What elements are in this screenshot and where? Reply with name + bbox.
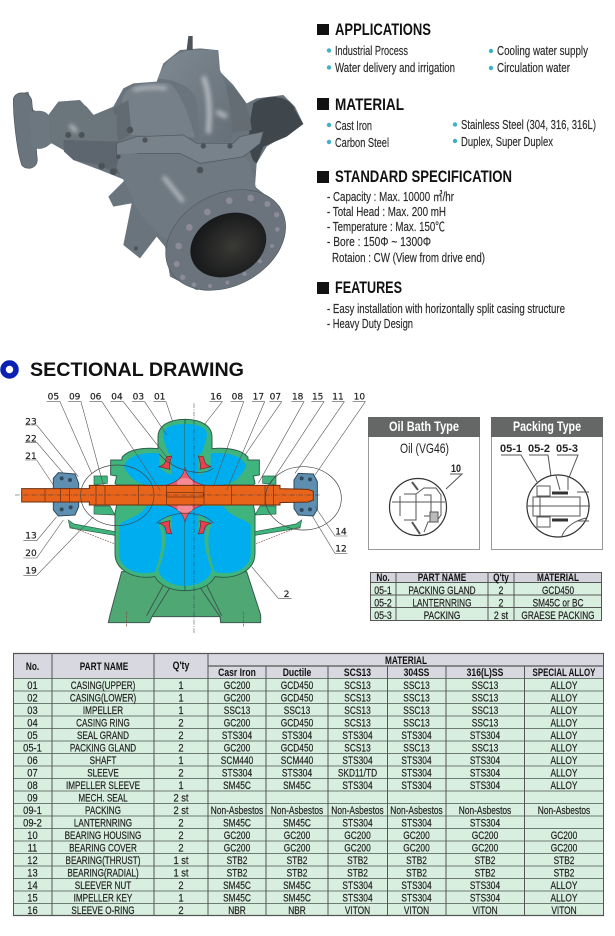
applications list: Cooling water supply bbox=[497, 44, 589, 58]
table column: ductile: Non-Asbestos bbox=[271, 805, 323, 817]
table column: scs13: SKD11/TD bbox=[338, 767, 377, 780]
part number leaders bbox=[23, 402, 365, 598]
table column: 316(L)ss: SSC13 bbox=[472, 680, 498, 692]
table column: special alloy: STB2 bbox=[554, 855, 574, 867]
table: packing parts: 05-2 bbox=[374, 598, 392, 610]
table header: No. bbox=[26, 661, 39, 673]
table column: part name: BEARING(RADIAL) bbox=[67, 867, 139, 880]
heading: material: MATERIAL bbox=[335, 95, 404, 114]
product photo: split case pump bbox=[13, 36, 303, 310]
table column: number: 16 bbox=[27, 905, 38, 917]
part number labels: 16 bbox=[210, 392, 222, 402]
table: packing parts bbox=[370, 572, 602, 622]
table column: 304ss bbox=[390, 680, 443, 917]
table column: ductile: GC200 bbox=[284, 842, 311, 855]
shaft bbox=[15, 403, 320, 633]
table column: quantity: 1 bbox=[178, 893, 184, 905]
table column: ductile: SSC13 bbox=[284, 705, 310, 717]
table column: 316(L)ss: STS304 bbox=[470, 880, 501, 892]
table column: ductile: GCD450 bbox=[281, 692, 314, 705]
table column: part name: CASING RING bbox=[76, 717, 130, 730]
table column: number: 15 bbox=[27, 893, 38, 905]
table column: ductile: SCM440 bbox=[281, 755, 314, 767]
table column: 316(L)ss: STS304 bbox=[470, 817, 501, 830]
material list: Cast Iron bbox=[335, 119, 372, 133]
sectional drawing diagram bbox=[15, 392, 365, 633]
table column: special alloy: STB2 bbox=[554, 867, 574, 880]
table column: 304ss: SSC13 bbox=[403, 705, 430, 717]
table column: part name: PACKING GLAND bbox=[70, 742, 136, 755]
table column: scs13: Non-Asbestos bbox=[331, 805, 384, 817]
table column: number: 09 bbox=[27, 793, 38, 805]
table column: part name: SLEEVER NUT bbox=[75, 880, 131, 892]
table column: 316(L)ss: STS304 bbox=[470, 780, 501, 792]
table column: ductile: SM45C bbox=[283, 780, 311, 792]
panel: packing type: 05-1 bbox=[500, 443, 522, 455]
table column: 304ss: STS304 bbox=[401, 880, 432, 892]
table column: 316(L)ss: Non-Asbestos bbox=[459, 805, 511, 817]
table column: special alloy: ALLOY bbox=[551, 780, 578, 792]
part number labels bbox=[25, 392, 365, 600]
table column: quantity: 2 st bbox=[173, 805, 189, 817]
table column: cast iron: Non-Asbestos bbox=[211, 805, 263, 817]
table column: ductile: STS304 bbox=[282, 767, 313, 780]
panel: oil bath type: Oil Bath Type bbox=[389, 418, 459, 434]
table column: quantity: 2 bbox=[178, 730, 184, 742]
table header: 304SS bbox=[404, 667, 430, 679]
table column: number: 11 bbox=[28, 843, 38, 855]
table column: cast iron: STS304 bbox=[222, 730, 253, 742]
part number labels: 22 bbox=[25, 435, 37, 445]
table column: 316(L)ss: SSC13 bbox=[472, 742, 498, 755]
table column: special alloy: ALLOY bbox=[551, 705, 578, 717]
table column: 304ss: STS304 bbox=[401, 780, 432, 792]
table header: PART NAME bbox=[80, 661, 129, 673]
table column: special alloy bbox=[538, 680, 590, 917]
part number labels: 17 bbox=[253, 392, 264, 402]
table column: scs13: GC200 bbox=[344, 842, 371, 855]
heading: material bbox=[317, 95, 404, 114]
table column: 316(L)ss: STS304 bbox=[470, 892, 501, 905]
table header: Q'ty bbox=[173, 660, 190, 672]
specification list: - Bore : 150Φ ~ 1300Φ bbox=[327, 235, 431, 249]
table column: ductile: SM45C bbox=[283, 817, 311, 830]
table column: 304ss: STB2 bbox=[406, 855, 427, 867]
table column: cast iron: STS304 bbox=[222, 767, 253, 780]
table column: number: 10 bbox=[27, 830, 38, 842]
material list: Carbon Steel bbox=[335, 136, 389, 150]
applications list bbox=[327, 44, 589, 75]
casing and water passages bbox=[68, 419, 302, 591]
table column: part name: LANTERNRING bbox=[74, 817, 132, 830]
table: packing parts: 2 bbox=[499, 598, 504, 610]
table column: scs13: SCS13 bbox=[344, 680, 371, 692]
table column: 304ss: SSC13 bbox=[403, 680, 430, 692]
table column: cast iron: STB2 bbox=[227, 867, 247, 880]
table column: 316(L)ss: STB2 bbox=[475, 867, 495, 880]
table column: ductile bbox=[271, 680, 323, 917]
table column: 304ss: GC200 bbox=[403, 830, 430, 842]
table column: 316(L)ss bbox=[459, 680, 511, 917]
table column: special alloy: ALLOY bbox=[551, 892, 578, 905]
specification list: - Temperature : Max. 150℃ bbox=[327, 220, 445, 234]
table: packing parts: PACKING GLAND bbox=[408, 585, 476, 597]
table column: 316(L)ss: GC200 bbox=[472, 842, 499, 855]
table column: scs13: SCS13 bbox=[344, 717, 371, 730]
table column: number: 04 bbox=[27, 718, 38, 730]
table column: 304ss: STB2 bbox=[406, 867, 427, 880]
table column: 304ss: SSC13 bbox=[403, 742, 430, 755]
part number labels: 03 bbox=[133, 392, 144, 402]
part number labels: 20 bbox=[25, 549, 37, 559]
table column: number: 05-1 bbox=[23, 743, 42, 755]
table column: number: 14 bbox=[27, 880, 38, 892]
table column: ductile: STB2 bbox=[287, 855, 307, 867]
table column: 316(L)ss: SSC13 bbox=[472, 717, 498, 730]
table column: 316(L)ss: STS304 bbox=[470, 755, 501, 767]
applications list: Industrial Process bbox=[335, 44, 408, 58]
table column: scs13: STB2 bbox=[347, 855, 368, 867]
table column: number: 06 bbox=[27, 755, 38, 767]
table column: cast iron: GC200 bbox=[224, 717, 251, 730]
table column: special alloy: ALLOY bbox=[551, 755, 578, 767]
table column: quantity: 2 bbox=[178, 843, 184, 855]
table column: special alloy: GC200 bbox=[551, 830, 578, 842]
table column: cast iron: SSC13 bbox=[224, 705, 250, 717]
table: packing parts: GRAESE PACKING bbox=[521, 610, 595, 622]
table column: part name: MECH. SEAL bbox=[78, 792, 128, 805]
table column: quantity: 1 st bbox=[173, 855, 189, 867]
table column: 304ss: GC200 bbox=[403, 842, 430, 855]
heading: features bbox=[317, 278, 402, 297]
table column: scs13: GC200 bbox=[344, 830, 371, 842]
table: packing parts: MATERIAL bbox=[537, 572, 579, 584]
table column: ductile: SM45C bbox=[283, 880, 311, 892]
table: packing parts: PACKING bbox=[424, 610, 460, 622]
table column: 304ss: VITON bbox=[404, 905, 429, 917]
part number labels: 14 bbox=[335, 527, 347, 537]
table column: 304ss: STS304 bbox=[401, 767, 432, 780]
specification list: - Total Head : Max. 200 mH bbox=[327, 205, 446, 219]
part number labels: 2 bbox=[284, 590, 290, 600]
table column: cast iron: SM45C bbox=[223, 892, 251, 905]
table column: number: 12 bbox=[27, 855, 38, 867]
part number labels: 09 bbox=[69, 392, 81, 402]
part number labels: 01 bbox=[154, 392, 165, 402]
table: parts and materials bbox=[13, 653, 604, 917]
table column: 316(L)ss: STS304 bbox=[470, 767, 501, 780]
table column: special alloy: ALLOY bbox=[551, 880, 578, 892]
table: packing parts: Q'ty bbox=[493, 572, 509, 584]
table column: quantity: 1 st bbox=[173, 868, 189, 880]
panel: oil bath type: Oil (VG46) bbox=[400, 440, 449, 456]
table column: part name: IMPELLER KEY bbox=[74, 892, 133, 905]
table column: part name: CASING(LOWER) bbox=[70, 692, 136, 705]
table: packing parts: 2 st bbox=[494, 610, 508, 622]
panel: packing type: 05-2 bbox=[528, 443, 550, 455]
part number labels: 12 bbox=[335, 545, 347, 555]
table column: part name bbox=[65, 680, 141, 917]
heading: standard specification: STANDARD SPECIFICATION bbox=[335, 167, 512, 186]
table column: number: 05 bbox=[27, 730, 38, 742]
part number labels: 05 bbox=[48, 392, 59, 402]
table column: cast iron: SCM440 bbox=[221, 755, 254, 767]
table column: scs13: STS304 bbox=[342, 780, 373, 792]
table column: cast iron: GC200 bbox=[224, 842, 251, 855]
part number labels: 06 bbox=[90, 392, 102, 402]
table column: scs13: STS304 bbox=[342, 892, 373, 905]
table column: 316(L)ss: SSC13 bbox=[472, 705, 498, 717]
table column: special alloy: ALLOY bbox=[551, 767, 578, 780]
table column: number: 01 bbox=[27, 680, 38, 692]
table: packing parts: 05-1 bbox=[374, 585, 392, 597]
table column: quantity: 2 bbox=[178, 880, 184, 892]
part number labels: 15 bbox=[312, 392, 323, 402]
table column: special alloy: ALLOY bbox=[551, 742, 578, 755]
table column: quantity: 2 bbox=[178, 718, 184, 730]
table: packing parts: No. bbox=[376, 572, 390, 584]
table column: ductile: GC200 bbox=[284, 830, 311, 842]
heading: applications: APPLICATIONS bbox=[335, 20, 431, 39]
table column: ductile: STB2 bbox=[287, 867, 307, 880]
table column: quantity: 2 bbox=[178, 905, 184, 917]
table column: number: 09-1 bbox=[23, 805, 42, 817]
specification list bbox=[327, 190, 485, 265]
bearing housing left bbox=[53, 473, 79, 516]
table column: cast iron: NBR bbox=[228, 905, 246, 917]
material list bbox=[327, 118, 596, 150]
table column: number: 03 bbox=[27, 705, 38, 717]
table column: 316(L)ss: STB2 bbox=[475, 855, 495, 867]
part number labels: 23 bbox=[25, 417, 37, 427]
features list: - Heavy Duty Design bbox=[327, 317, 413, 331]
table column: 304ss: STS304 bbox=[401, 892, 432, 905]
table column: quantity: 2 bbox=[178, 818, 184, 830]
table column: cast iron: SM45C bbox=[223, 817, 251, 830]
part number labels: 11 bbox=[332, 392, 344, 402]
table column: number: 02 bbox=[27, 693, 38, 705]
table column: scs13: STS304 bbox=[342, 730, 373, 742]
table column: part name: BEARING(THRUST) bbox=[66, 855, 140, 867]
table header: SCS13 bbox=[344, 667, 372, 679]
table header bbox=[26, 655, 596, 679]
table column: quantity: 1 bbox=[178, 705, 184, 717]
table column: cast iron: GC200 bbox=[224, 692, 251, 705]
part number labels: 07 bbox=[270, 392, 281, 402]
table column: scs13: STS304 bbox=[342, 817, 373, 830]
table column: part name: CASING(UPPER) bbox=[71, 680, 135, 692]
material list: Duplex, Super Duplex bbox=[461, 135, 554, 149]
table: packing parts: PART NAME bbox=[418, 572, 467, 584]
table column: part name: SLEEVE bbox=[87, 767, 119, 780]
table column: cast iron: SM45C bbox=[223, 880, 251, 892]
table column: 304ss: SSC13 bbox=[403, 692, 430, 705]
table column: part name: BEARING COVER bbox=[69, 842, 137, 855]
table header: SPECIAL ALLOY bbox=[533, 667, 596, 679]
table column: special alloy: ALLOY bbox=[551, 692, 578, 705]
table column: ductile: NBR bbox=[288, 905, 306, 917]
table column: scs13: SCS13 bbox=[344, 692, 371, 705]
table column: quantity: 2 bbox=[178, 830, 184, 842]
bearing housing right bbox=[294, 473, 317, 516]
specification list: Rotaion : CW (View from drive end) bbox=[332, 251, 485, 265]
panel: packing type bbox=[491, 417, 603, 550]
table column: ductile: SM45C bbox=[283, 892, 311, 905]
table: packing parts: LANTERNRING bbox=[412, 597, 472, 610]
table column: number: 08 bbox=[27, 780, 38, 792]
panel: oil bath type bbox=[368, 417, 480, 550]
table column: quantity: 1 bbox=[178, 755, 184, 767]
table column: 316(L)ss: STS304 bbox=[470, 730, 501, 742]
heading: applications bbox=[317, 20, 431, 39]
table column: quantity: 2 bbox=[178, 743, 184, 755]
table column: scs13: STS304 bbox=[342, 755, 373, 767]
table column: 304ss: SSC13 bbox=[403, 717, 430, 730]
table column: special alloy: GC200 bbox=[551, 842, 578, 855]
table: packing parts: 05-3 bbox=[374, 610, 392, 622]
table header: MATERIAL bbox=[385, 655, 427, 667]
table column: ductile: STS304 bbox=[282, 730, 313, 742]
table column: number: 09-2 bbox=[23, 818, 42, 830]
table column: number: 13 bbox=[27, 868, 38, 880]
heading: sectional drawing: SECTIONAL DRAWING bbox=[30, 360, 244, 381]
table column: number: 07 bbox=[27, 768, 38, 780]
table column: cast iron: SM45C bbox=[223, 780, 251, 792]
table column: 316(L)ss: SSC13 bbox=[472, 692, 498, 705]
panel: packing type: 05-3 bbox=[556, 443, 578, 455]
table column: scs13: SCS13 bbox=[344, 705, 371, 717]
table column: special alloy: VITON bbox=[551, 905, 577, 917]
part number labels: 10 bbox=[354, 392, 365, 402]
table column: scs13: VITON bbox=[345, 905, 370, 917]
table column: 304ss: STS304 bbox=[401, 817, 432, 830]
table header: Casr Iron bbox=[218, 667, 256, 679]
applications list: Water delivery and irrigation bbox=[335, 61, 455, 75]
table column: special alloy: ALLOY bbox=[551, 730, 578, 742]
table column: cast iron: GC200 bbox=[224, 742, 251, 755]
table column: scs13: SCS13 bbox=[344, 742, 371, 755]
table header: 316(L)SS bbox=[467, 667, 504, 679]
table column: special alloy: Non-Asbestos bbox=[538, 805, 590, 817]
table column: ductile: GCD450 bbox=[281, 680, 314, 692]
table column: part name: BEARING HOUSING bbox=[65, 830, 141, 842]
table column: quantity: 2 bbox=[178, 768, 184, 780]
table column: 316(L)ss: GC200 bbox=[472, 830, 499, 842]
part number labels: 13 bbox=[25, 532, 37, 542]
panel: oil bath type: 10 bbox=[451, 463, 461, 475]
table column: special alloy: ALLOY bbox=[551, 680, 578, 692]
features list bbox=[327, 302, 565, 331]
table column: part name: PACKING bbox=[85, 805, 121, 817]
table: packing parts: 2 bbox=[499, 585, 504, 597]
table column: quantity: 1 bbox=[178, 680, 184, 692]
table: packing parts: SM45C or BC bbox=[533, 597, 583, 610]
table column: quantity bbox=[173, 680, 189, 917]
table column: 304ss: Non-Asbestos bbox=[390, 805, 443, 817]
table column: quantity: 1 bbox=[178, 693, 184, 705]
table column: ductile: GCD450 bbox=[281, 717, 314, 730]
table column: scs13 bbox=[331, 680, 384, 917]
part number labels: 08 bbox=[232, 392, 243, 402]
table column: ductile: GCD450 bbox=[281, 742, 314, 755]
table column: special alloy: ALLOY bbox=[551, 717, 578, 730]
table: packing parts: GCD450 bbox=[542, 585, 575, 597]
table column: cast iron: STB2 bbox=[227, 855, 247, 867]
panel: packing type: Packing Type bbox=[513, 418, 581, 434]
table column: scs13: STB2 bbox=[347, 867, 368, 880]
table column: 316(L)ss: VITON bbox=[472, 905, 498, 917]
table column: part name: SEAL GRAND bbox=[77, 730, 129, 742]
table column: part name: IMPELLER bbox=[83, 705, 123, 717]
table column: cast iron: GC200 bbox=[224, 830, 251, 842]
part number labels: 04 bbox=[111, 392, 123, 402]
applications list: Circulation water bbox=[497, 61, 570, 75]
table column: number bbox=[23, 680, 42, 917]
table header: Ductile bbox=[283, 667, 312, 679]
table column: part name: SHAFT bbox=[90, 755, 116, 767]
table column: part name: IMPELLER SLEEVE bbox=[66, 780, 140, 792]
detail circles bbox=[81, 454, 341, 530]
heading: features: FEATURES bbox=[335, 278, 402, 297]
table column: quantity: 2 st bbox=[173, 793, 189, 805]
part number labels: 18 bbox=[292, 392, 304, 402]
table column: cast iron bbox=[211, 680, 263, 917]
table column: 304ss: STS304 bbox=[401, 730, 432, 742]
table column: scs13: STS304 bbox=[342, 880, 373, 892]
impeller bbox=[165, 467, 205, 523]
specification list: - Capacity : Max. 10000 ㎥/hr bbox=[327, 190, 454, 204]
part number labels: 19 bbox=[25, 566, 37, 576]
table column: part name: SLEEVE O-RING bbox=[71, 905, 135, 917]
pump base bbox=[108, 572, 261, 627]
table column: cast iron: GC200 bbox=[224, 680, 251, 692]
part number labels: 21 bbox=[25, 452, 37, 462]
table column: quantity: 1 bbox=[178, 780, 184, 792]
table column: 304ss: STS304 bbox=[401, 755, 432, 767]
